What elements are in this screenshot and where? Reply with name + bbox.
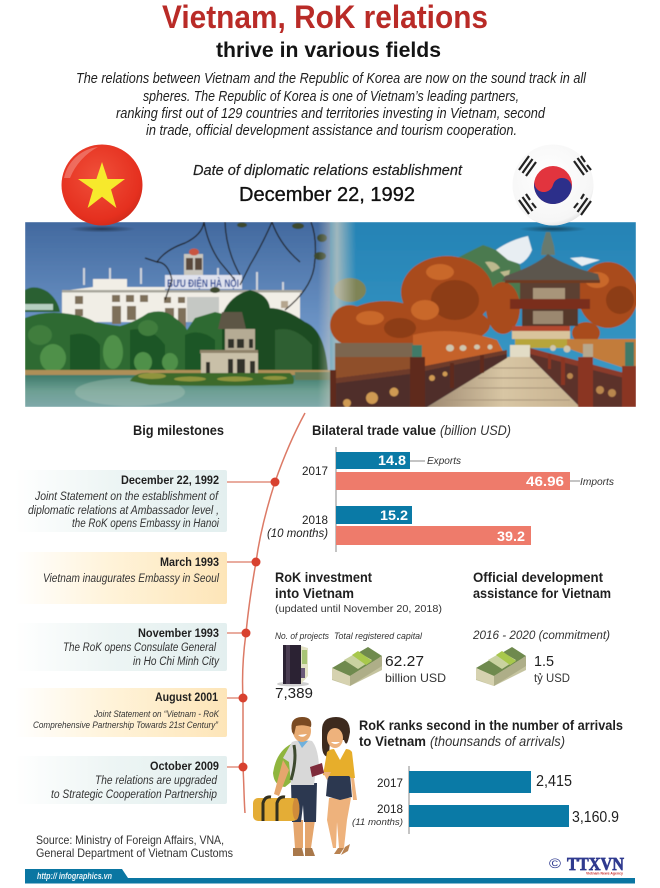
milestone: December 22, 1992: December 22, 1992: [121, 473, 219, 487]
date of diplomatic relations: [193, 162, 463, 206]
trade heading: (billion USD): [440, 422, 511, 438]
man hoodie: [283, 740, 319, 785]
bar chart: bilateral trade: 39.2: [497, 528, 525, 544]
column labels: [275, 630, 610, 642]
intro text: in trade, official development assistance and tourism cooperation.: [146, 123, 517, 139]
man legs: [293, 820, 315, 848]
bar chart: arrivals: 3,160.9: [572, 809, 619, 826]
arrivals heading: to Vietnam: [359, 733, 426, 749]
agency logo: [549, 854, 624, 876]
milestone: October 2009: to Strategic Cooperation Partnership: [51, 789, 218, 801]
source note: [36, 833, 233, 860]
subtitle: thrive in various fields: [216, 39, 441, 62]
ODA heading: Official development: [473, 569, 603, 585]
bar chart: bilateral trade: (10 months): [267, 526, 328, 540]
intro text: ranking first out of 129 countries and territories investing in Vietnam, second: [116, 106, 546, 122]
source note: General Department of Vietnam Customs: [36, 846, 233, 860]
milestone: November 1993: [15, 623, 227, 671]
agency logo: ©: [549, 855, 562, 871]
intro text: [76, 71, 587, 139]
investment heading: [275, 569, 442, 615]
milestone: March 1993: Vietnam inaugurates Embassy in Seoul: [43, 573, 219, 585]
ODA value: 1.5: [534, 653, 554, 670]
arrivals heading: RoK ranks second in the number of arrivals: [359, 717, 623, 733]
woman top: [323, 749, 355, 778]
woman legs: [327, 798, 351, 848]
milestone: December 22, 1992: [15, 470, 227, 532]
bar chart: arrivals: 2017: [377, 776, 403, 790]
woman arm: [351, 778, 357, 800]
woman face: [327, 728, 343, 748]
woman hair: [322, 717, 350, 757]
bar chart: arrivals: (11 months): [352, 817, 403, 827]
investment heading: into Vietnam: [275, 585, 354, 601]
bar chart: arrivals: 2018: [377, 802, 403, 816]
milestone: August 2001: Joint Statement on “Vietnam - RoK: [93, 709, 220, 720]
milestone: March 1993: [15, 552, 227, 604]
milestone: March 1993: March 1993: [160, 555, 219, 569]
date of diplomatic relations: December 22, 1992: [239, 184, 415, 206]
icon: projects documents: [277, 645, 309, 686]
flag: Vietnam: [62, 144, 142, 232]
milestone: November 1993: The RoK opens Consulate General: [63, 642, 216, 654]
backpack: [273, 744, 296, 787]
icon: money stack: [332, 647, 382, 686]
bar chart: bilateral trade: 2017: [302, 464, 328, 478]
photo: Hanoi and Seoul landmarks: BƯU ĐIỆN HÀ NỘI: [167, 277, 239, 290]
agency logo: TTXVN: [567, 854, 624, 874]
projects value: 7,389: [275, 685, 313, 702]
footer band with URL: [25, 869, 635, 884]
agency logo: Vietnam News Agency: [586, 870, 624, 876]
bar chart: bilateral trade: Imports: [580, 476, 615, 488]
bar chart: bilateral trade: 2018: [302, 513, 328, 527]
milestone: December 22, 1992: Joint Statement on the establishment of: [34, 491, 220, 503]
date of diplomatic relations: Date of diplomatic relations establishment: [193, 162, 463, 179]
investment heading: (updated until November 20, 2018): [275, 603, 442, 615]
bar chart: bilateral trade: Exports: [427, 455, 462, 467]
intro text: The relations between Vietnam and the Republic of Korea are now on the sound track in all: [76, 71, 587, 87]
flag: Republic of Korea: [512, 144, 594, 232]
milestone: August 2001: Comprehensive Partnership Towards 21st Century”: [33, 720, 219, 731]
source note: Source: Ministry of Foreign Affairs, VNA,: [36, 833, 224, 847]
milestone: August 2001: [15, 688, 227, 737]
ODA heading: assistance for Vietnam: [473, 585, 611, 601]
bar chart: bilateral trade: 15.2: [380, 507, 408, 523]
straps: [291, 745, 295, 780]
investment capital value: billion USD: [385, 671, 446, 685]
passport: [310, 763, 324, 777]
milestone: October 2009: The relations are upgraded: [95, 775, 218, 787]
woman shoes: [334, 844, 350, 855]
title: Vietnam, RoK relations: [162, 0, 488, 35]
milestone: October 2009: [15, 756, 227, 804]
photo: Hanoi and Seoul landmarks: [25, 222, 638, 407]
column labels: Total registered capital: [334, 631, 423, 641]
milestone: August 2001: August 2001: [155, 690, 218, 704]
man shoes: [293, 848, 315, 856]
man head: [293, 720, 311, 742]
bar chart: bilateral trade: 14.8: [378, 452, 406, 468]
trade heading: [312, 422, 511, 438]
woman skirt: [326, 774, 352, 800]
milestone: December 22, 1992: the RoK opens Embassy in Hanoi: [72, 518, 219, 530]
man arm: [274, 760, 289, 796]
milestone: December 22, 1992: diplomatic relations at Ambassador level ,: [28, 505, 219, 517]
timeline curve: [226, 413, 305, 813]
intro text: spheres. The Republic of Korea is one of Vietnam’s leading partners,: [143, 89, 519, 105]
investment heading: RoK investment: [275, 569, 372, 585]
investment capital value: 62.27: [385, 653, 424, 670]
ODA value: [534, 653, 570, 685]
investment capital value: [385, 653, 446, 685]
milestone: October 2009: October 2009: [150, 759, 219, 773]
arrivals heading: [359, 717, 623, 749]
milestone: November 1993: November 1993: [138, 626, 219, 640]
arrivals heading: (thounsands of arrivals): [430, 733, 565, 749]
bar chart: arrivals: 2,415: [536, 773, 572, 790]
milestones heading: Big milestones: [133, 422, 224, 438]
column labels: 2016 - 2020 (commitment): [472, 630, 610, 642]
bar chart: bilateral trade: 46.96: [526, 473, 564, 489]
column labels: No. of projects: [275, 631, 329, 641]
ODA value: tỷ USD: [534, 671, 570, 685]
trade heading: Bilateral trade value: [312, 422, 436, 438]
icon: money stack: [476, 647, 526, 686]
footer band with URL: http:// infographics.vn: [37, 871, 112, 882]
bar chart: arrivals: [352, 766, 619, 834]
man shorts: [291, 783, 317, 822]
duffel bag: [253, 798, 298, 821]
ODA heading: [473, 569, 611, 601]
illustration: couple of travellers: [253, 717, 357, 856]
bar chart: bilateral trade: [267, 447, 615, 552]
milestone: November 1993: in Ho Chi Minh City: [133, 656, 220, 668]
